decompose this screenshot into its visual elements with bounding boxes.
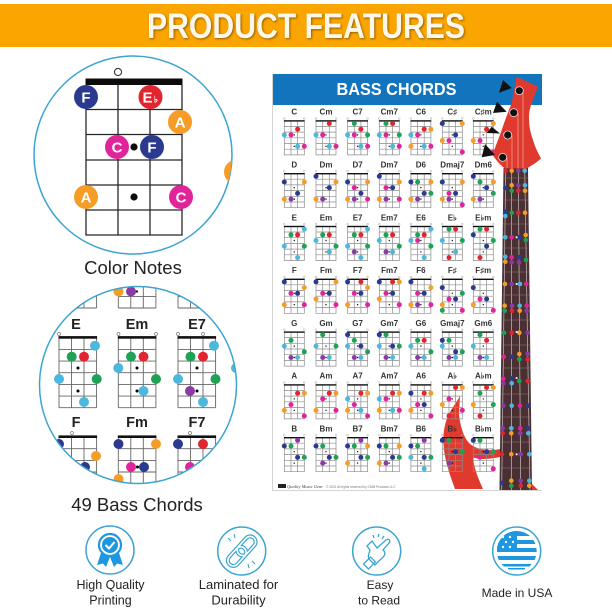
chord charts: [282, 108, 496, 472]
row B: Bm: [320, 424, 332, 434]
row A: A7: [352, 372, 363, 381]
feature: easy to read: to Read: [358, 594, 400, 608]
note markers: ♭: [154, 94, 158, 104]
row C: Cm: [320, 108, 332, 117]
row F: Fm: [320, 266, 332, 275]
row E: Em7: [381, 213, 398, 222]
row B: Bm7: [381, 424, 399, 434]
note markers: E: [142, 90, 153, 106]
row C: C♯: [447, 108, 457, 117]
label: Easy: [367, 578, 393, 592]
label: High Quality: [76, 578, 145, 592]
icon: flag: [497, 531, 537, 570]
row G: [282, 319, 494, 366]
icon: snapping hand: [363, 534, 390, 569]
poster footer: © 2021 All rights reserved by CMM Products LLC: [326, 485, 396, 489]
feature: easy to read: [353, 527, 401, 608]
row F: F: [292, 266, 297, 275]
row G: Gm: [319, 319, 333, 328]
note markers: F: [81, 90, 91, 106]
icon: ribbon badge: [97, 534, 123, 567]
row C: Cm7: [381, 108, 399, 117]
row B: B♭: [448, 424, 457, 434]
tuning pegs: [482, 80, 523, 161]
row E: [282, 213, 496, 261]
row F: F♯m: [475, 266, 491, 275]
row D: Dmaj7: [440, 160, 465, 170]
row A: A♭: [448, 372, 457, 381]
row F: Fm7: [381, 266, 398, 275]
row B: B: [291, 424, 297, 434]
poster header: BASS CHORDS: [336, 79, 456, 99]
chord names: F: [72, 415, 81, 431]
feature: laminated for durability: [199, 527, 279, 608]
row F: F♯: [448, 266, 457, 275]
row A: A♭m: [475, 372, 492, 381]
row D: Dm6: [475, 160, 493, 170]
row C: C6: [416, 108, 427, 117]
row B: B6: [416, 424, 427, 434]
row E: Em: [320, 213, 332, 222]
fret note dots: [499, 168, 532, 488]
label: Laminated for: [199, 577, 279, 592]
row D: Dm7: [381, 160, 399, 170]
poster footer: Quality Music Gear: [287, 484, 323, 489]
note markers: C: [112, 140, 123, 156]
feature: high quality printing: Printing: [89, 594, 132, 608]
bass body: [443, 396, 538, 490]
row D: Dm: [320, 160, 332, 170]
chord names: F7: [189, 415, 205, 431]
row B: [282, 424, 496, 472]
label: color notes: Color Notes: [84, 257, 182, 278]
feature: high quality printing: [76, 526, 145, 608]
row C: C7: [352, 108, 363, 117]
note dots: [54, 286, 241, 484]
row A: A6: [416, 372, 427, 381]
panel: color notes circle: [34, 56, 248, 254]
note markers: A: [175, 114, 186, 132]
chord names: E7: [188, 317, 206, 333]
icon: chain link: [226, 534, 258, 568]
chord detail grids: [57, 287, 216, 483]
label: 49 bass chords: 49 Bass Chords: [71, 494, 203, 515]
row A: Am: [320, 372, 332, 381]
row C: [282, 108, 496, 155]
header banner: [0, 4, 612, 47]
feature: made in usa: [482, 527, 552, 600]
row E: E7: [353, 213, 363, 222]
note markers: C: [176, 190, 187, 206]
row E: E: [292, 213, 298, 222]
row B: B7: [352, 424, 363, 434]
row E: E♭: [448, 213, 457, 222]
row G: G6: [416, 319, 427, 328]
panel: bass chords circle: [38, 286, 238, 484]
row G: Gm7: [380, 319, 399, 328]
row D: D7: [352, 160, 363, 170]
row F: [282, 266, 496, 314]
note markers: A: [81, 190, 92, 206]
row A: Am7: [381, 372, 399, 381]
row F: F7: [353, 266, 363, 275]
row D: [282, 160, 496, 208]
row A: [282, 372, 496, 419]
row G: G: [291, 319, 297, 328]
fretboard: [499, 168, 532, 490]
row F: F6: [416, 266, 426, 275]
title: PRODUCT FEATURES: [147, 7, 465, 46]
row D: D6: [416, 160, 427, 170]
note markers: [74, 85, 248, 209]
poster footer: [278, 484, 396, 489]
chord names: Em: [126, 317, 148, 333]
row B: B♭m: [475, 424, 492, 434]
chord names: [71, 317, 206, 431]
row E: E♭m: [475, 213, 491, 222]
row E: E6: [416, 213, 426, 222]
note markers: F: [147, 140, 157, 156]
row C: C: [291, 108, 297, 117]
row D: D: [291, 160, 297, 170]
chord names: Fm: [126, 415, 148, 431]
row A: A: [291, 372, 297, 381]
row G: Gmaj7: [440, 319, 465, 328]
poster: bass chords: [272, 74, 542, 490]
row G: G7: [352, 319, 363, 328]
headstock: [482, 77, 541, 168]
row C: C♯m: [475, 108, 492, 117]
row G: Gm6: [474, 319, 493, 328]
label: Made in USA: [482, 586, 552, 600]
neck diagram: [85, 68, 183, 235]
feature: laminated for durability: Durability: [211, 592, 266, 608]
chord names: E: [71, 317, 81, 333]
poster header: [273, 74, 542, 105]
